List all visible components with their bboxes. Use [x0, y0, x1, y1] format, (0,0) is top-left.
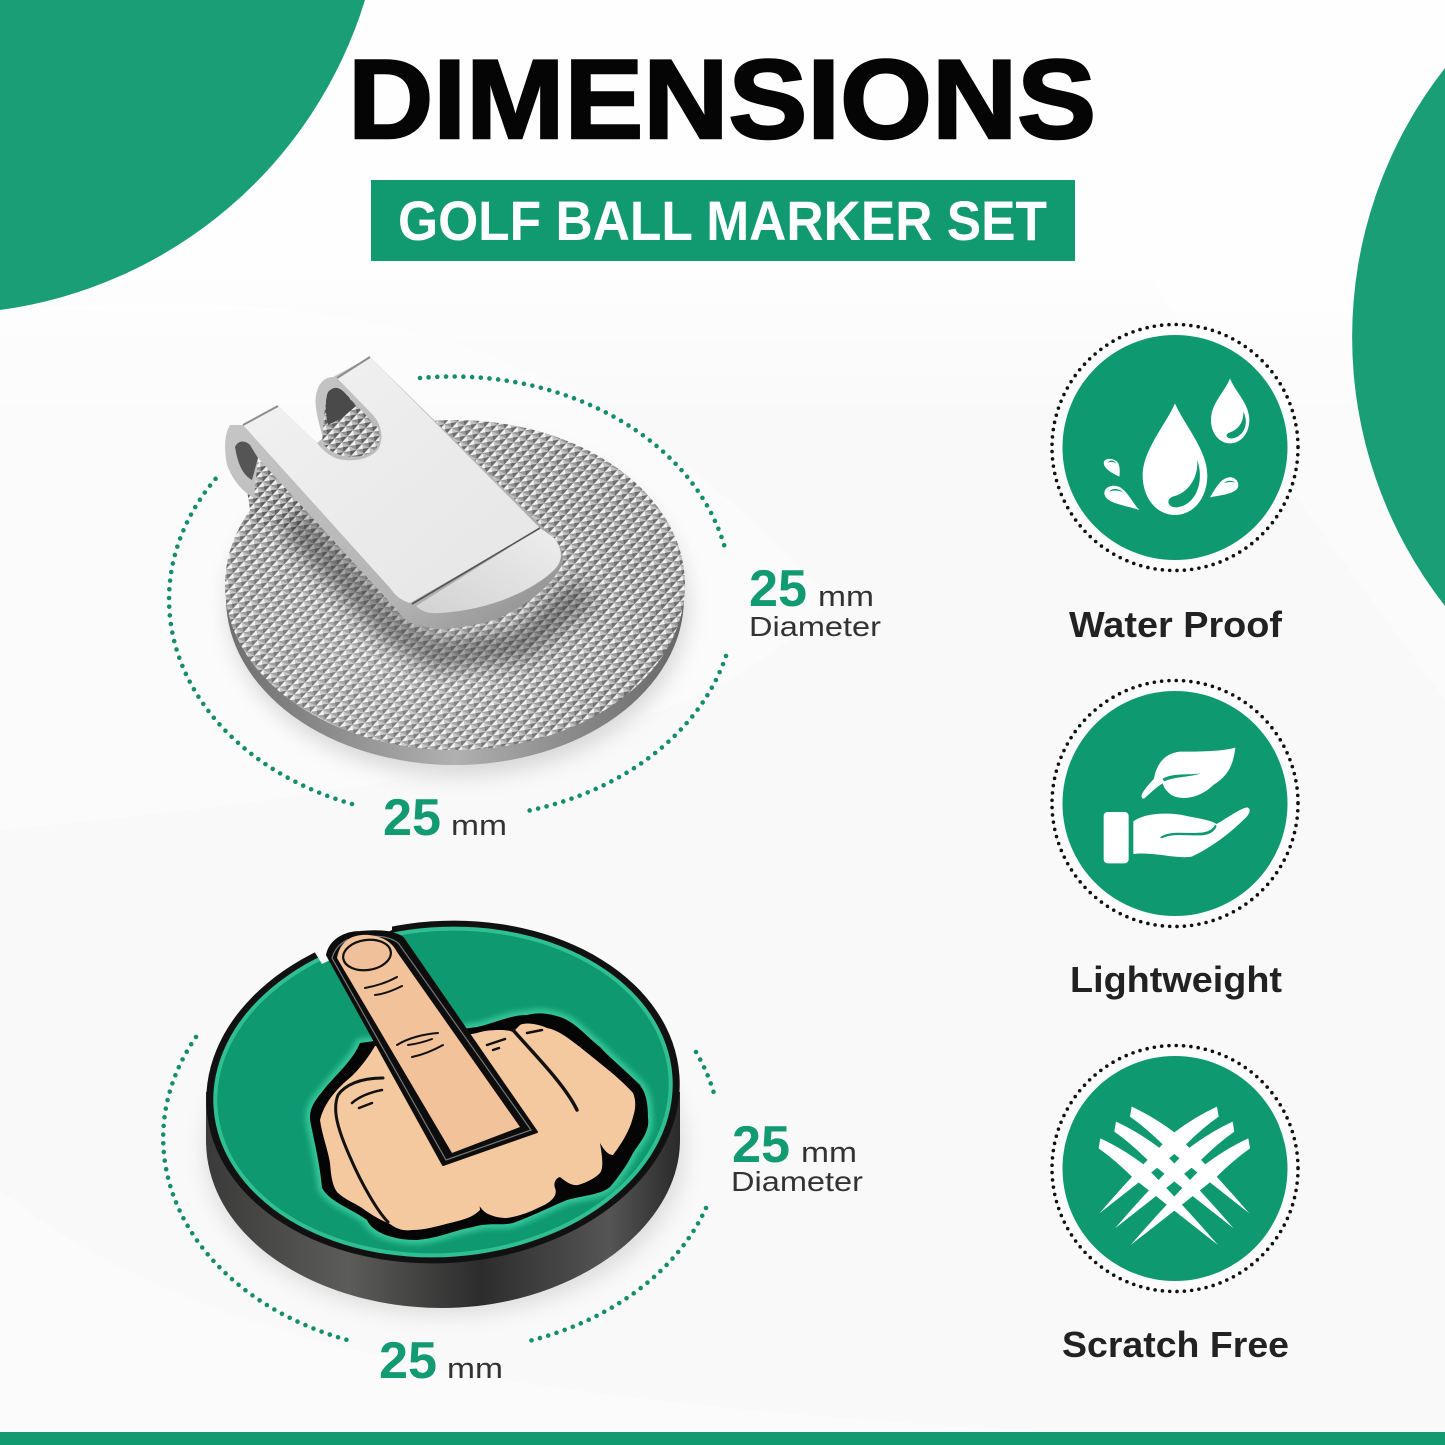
icon: scratch free: [1052, 1046, 1298, 1292]
label: 25 mm, clip marker: mm: [451, 810, 507, 842]
product: silver knurled marker with hat clip: [225, 357, 688, 776]
hand outline: [310, 1013, 648, 1240]
label: 25 mm diameter, clip marker: [749, 560, 881, 642]
disc knurled face: [225, 420, 685, 750]
knurl seen behind clip: [243, 462, 305, 530]
coin side wall: [206, 1092, 680, 1308]
clip silhouette: [225, 357, 563, 629]
clip top edges: [243, 357, 370, 425]
subtitle banner: GOLF BALL MARKER SET: [398, 189, 1047, 252]
label: 25 mm, clip marker: [383, 789, 507, 847]
clip left slot: [235, 441, 258, 480]
raised finger: [337, 935, 520, 1153]
label: 25 mm, enamel marker: [379, 1332, 503, 1390]
knuckle and finger lines: [336, 1030, 577, 1222]
disc soft shadow: [228, 436, 688, 776]
clip main face: [243, 357, 540, 603]
slit through rim: [306, 908, 392, 964]
bottom green bar: [0, 1432, 1445, 1445]
clip crease line: [412, 528, 540, 604]
clip shadow on disc: [292, 520, 585, 655]
label: 25 mm, enamel marker: mm: [447, 1353, 503, 1385]
label: lightweight: Lightweight: [1070, 959, 1282, 1000]
label: 25 mm diameter, clip marker: 25: [749, 560, 807, 618]
finger crease lines: [365, 977, 443, 1057]
coin black rim: [195, 905, 691, 1279]
product: enamel green marker with hand design: [195, 905, 691, 1315]
label: water proof: Water Proof: [1069, 604, 1283, 645]
disc rim: [226, 431, 684, 765]
title: DIMENSIONS: [348, 37, 1096, 162]
label: 25 mm diameter, enamel marker: [731, 1116, 863, 1197]
hand glow: [310, 1013, 648, 1240]
label: 25 mm diameter, clip marker: Diameter: [749, 611, 881, 642]
label: 25 mm diameter, enamel marker: 25: [732, 1116, 790, 1174]
label: 25 mm diameter, enamel marker: mm: [801, 1137, 857, 1169]
label: 25 mm, clip marker: 25: [383, 789, 441, 847]
label: scratch free: Scratch Free: [1062, 1324, 1289, 1365]
dotted measurement ring: enamel marker: [163, 1037, 715, 1342]
icon: lightweight: [1052, 680, 1298, 926]
fingernail: [341, 937, 393, 973]
label: 25 mm diameter, clip marker: mm: [818, 581, 874, 613]
dotted measurement ring: clip marker: [169, 377, 726, 812]
raised finger frame: [327, 931, 537, 1165]
hand skin: [320, 1024, 635, 1230]
clip right slot: [322, 388, 380, 457]
clip bent tip: [416, 528, 561, 613]
coin green face: [202, 911, 684, 1273]
label: 25 mm, enamel marker: 25: [379, 1332, 437, 1390]
icon: water proof: [1052, 324, 1298, 570]
decorative edge: right green shape: [1352, 68, 1445, 606]
decorative corner: top-left green shape: [0, 0, 365, 310]
label: 25 mm diameter, enamel marker: Diameter: [731, 1166, 863, 1197]
coin soft shadow: [205, 985, 685, 1315]
